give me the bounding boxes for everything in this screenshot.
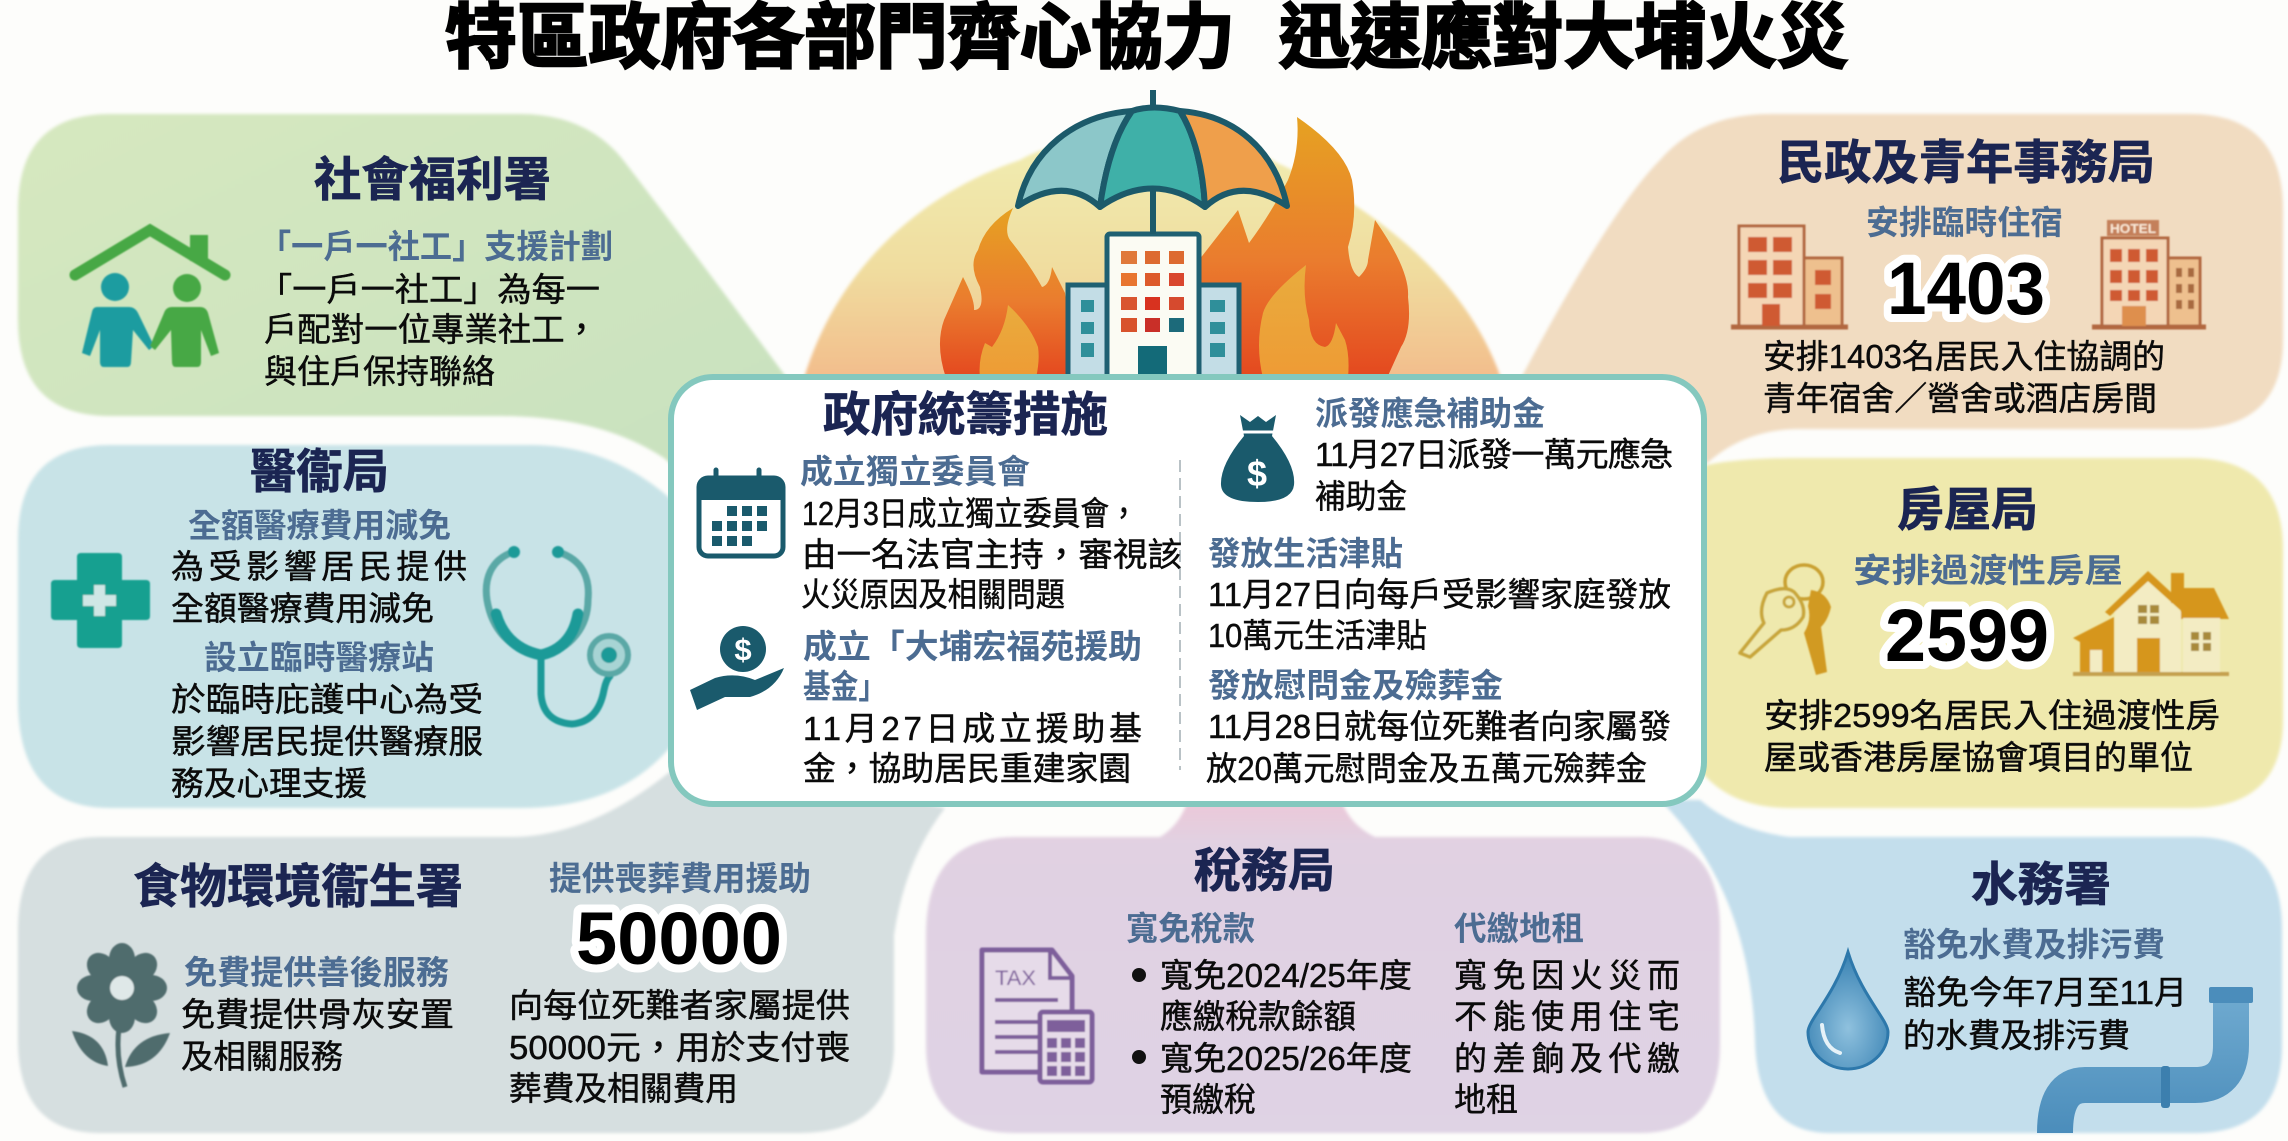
icon: pipe	[2055, 987, 2253, 1133]
panel: social welfare department	[18, 114, 792, 490]
icon: keys	[1740, 565, 1831, 675]
text block: temporary medical stations	[171, 681, 483, 802]
icon: umbrella	[1018, 90, 1287, 234]
text block: rent payment: 不能使用住宅	[1454, 998, 1680, 1035]
text block: relief fund	[803, 710, 1142, 787]
heading: food and environmental hygiene department: 食物環境衞生署	[133, 860, 463, 913]
text block: transitional housing: 屋或香港房屋協會項目的單位	[1764, 739, 2193, 776]
icon: hotel: HOTEL	[2110, 221, 2156, 236]
subheading: medical fee waiver: 全額醫療費用減免	[188, 507, 451, 544]
list: tax waiver items: 應繳稅款餘額	[1160, 998, 1356, 1035]
subheading: water fee waiver: 豁免水費及排污費	[1903, 926, 2165, 963]
text block: independent committee	[801, 495, 1182, 613]
heading: social welfare department: 社會福利署	[314, 153, 551, 206]
text block: temporary accommodation: 青年宿舍／營舍或酒店房間	[1763, 380, 2157, 417]
icon: flower	[72, 943, 170, 1087]
panel: housing bureau	[1690, 458, 2283, 808]
text block: independent committee: 由一名法官主持，審視該	[802, 536, 1182, 573]
icon: calendar	[699, 470, 783, 556]
text block: funeral expense assistance: 向每位死難者家屬提供	[509, 987, 850, 1024]
icon: money bag: $	[1247, 453, 1267, 494]
subheading: temporary accommodation: 安排臨時住宿	[1866, 204, 2063, 241]
list: tax waiver items	[1132, 957, 1412, 1118]
text block: free after-death services: 免費提供骨灰安置	[181, 996, 454, 1033]
text block: rent payment: 地租	[1454, 1081, 1518, 1118]
number: 2599: 2599	[1885, 594, 2049, 677]
text block: transitional housing	[1764, 697, 2220, 776]
text block: rent payment: 寬免因火災而	[1454, 957, 1680, 994]
title	[445, 0, 1848, 78]
icon: medical cross	[51, 553, 150, 648]
text block: living allowance: 11月27日向每戶受影響家庭發放	[1208, 576, 1671, 613]
text block: condolence and funeral payment: 11月28日就每位死難者向家屬發	[1208, 708, 1671, 745]
text block: temporary medical stations: 影響居民提供醫療服	[171, 723, 483, 760]
panel: home affairs and youth affairs bureau	[1520, 114, 2283, 470]
text block: one household one social worker: 戶配對一位專業社工，	[264, 311, 598, 348]
icon: hotel	[2092, 220, 2206, 327]
text block: independent committee: 火災原因及相關問題	[801, 576, 1065, 613]
icon: building	[1068, 234, 1239, 377]
heading: home affairs and youth affairs bureau: 民政及青年事務局	[1777, 136, 2155, 189]
text block: medical fee waiver: 全額醫療費用減免	[171, 590, 434, 627]
text block: one household one social worker: 「一戶一社工」為每一	[258, 271, 600, 308]
text block: temporary medical stations: 於臨時庇護中心為受	[171, 681, 483, 718]
subheading: rent payment: 代繳地租	[1454, 910, 1584, 947]
heading: water supplies department: 水務署	[1971, 858, 2111, 911]
text block: water fee waiver: 的水費及排污費	[1903, 1017, 2130, 1054]
heading: inland revenue department: 稅務局	[1194, 844, 1335, 897]
text block: funeral expense assistance: 50000元，用於支付喪	[509, 1029, 850, 1066]
text block: free after-death services: 及相關服務	[181, 1038, 343, 1075]
heading: housing bureau: 房屋局	[1897, 483, 2038, 536]
number: 1403: 1403	[1887, 247, 2045, 330]
text block: rent payment	[1454, 957, 1680, 1118]
illustration: umbrella shielding building from fire	[804, 90, 1501, 378]
text block: medical fee waiver	[171, 548, 467, 627]
subheading: living allowance: 發放生活津貼	[1208, 535, 1403, 572]
subheading: funeral expense assistance: 提供喪葬費用援助	[549, 860, 811, 897]
number: 50000: 50000	[576, 897, 782, 980]
heading: government coordinated measures: 政府統籌措施	[823, 388, 1108, 441]
subheading: relief fund	[803, 628, 1142, 705]
text block: temporary accommodation	[1763, 338, 2165, 417]
text block: one household one social worker	[258, 271, 600, 390]
text block: emergency subsidy: 補助金	[1315, 478, 1407, 515]
list: tax waiver items: 預繳稅	[1160, 1081, 1256, 1118]
panel: health bureau	[18, 445, 700, 808]
text block: free after-death services	[181, 996, 454, 1075]
icon: home with two people	[75, 230, 225, 367]
panel: food and environmental hygiene department	[18, 760, 945, 1133]
text block: transitional housing: 安排2599名居民入住過渡性房	[1764, 697, 2220, 734]
panel: water supplies department	[1660, 800, 2282, 1133]
list: tax waiver items: 寬免2024/25年度	[1160, 957, 1412, 994]
title: 特區政府各部門齊心協力	[445, 0, 1235, 78]
text block: funeral expense assistance: 葬費及相關費用	[509, 1070, 738, 1107]
text block: condolence and funeral payment	[1206, 708, 1671, 787]
icon: stethoscope	[486, 546, 628, 724]
icon: left flame	[940, 208, 1075, 378]
text block: rent payment: 的差餉及代繳	[1454, 1040, 1680, 1077]
subheading: independent committee: 成立獨立委員會	[800, 453, 1030, 490]
text block: temporary medical stations: 務及心理支援	[171, 765, 367, 802]
icon: right flame	[1199, 117, 1409, 378]
icon: money bag	[1221, 415, 1294, 502]
subheading: emergency subsidy: 派發應急補助金	[1315, 395, 1545, 432]
icon: water drop	[1808, 952, 1888, 1069]
icon: house	[2073, 571, 2229, 676]
subheading: transitional housing: 安排過渡性房屋	[1853, 552, 2123, 589]
text block: medical fee waiver: 為受影響居民提供	[171, 548, 467, 585]
text block: independent committee: 12月3日成立獨立委員會，	[802, 495, 1138, 532]
text block: living allowance	[1208, 576, 1671, 654]
title: 迅速應對大埔火災	[1279, 0, 1848, 78]
subheading: tax waiver: 寬免稅款	[1126, 910, 1255, 947]
text block: water fee waiver	[1903, 974, 2187, 1054]
text block: water fee waiver: 豁免今年7月至11月	[1903, 974, 2187, 1011]
subheading: relief fund: 成立「大埔宏福苑援助	[803, 628, 1142, 665]
subheading: temporary medical stations: 設立臨時醫療站	[204, 639, 434, 676]
text block: temporary accommodation: 安排1403名居民入住協調的	[1763, 338, 2165, 375]
text block: relief fund: 金，協助居民重建家園	[803, 750, 1131, 787]
icon: hand holding coin	[690, 626, 784, 710]
text block: relief fund: 11月27日成立援助基	[803, 710, 1142, 747]
text block: emergency subsidy	[1315, 436, 1673, 515]
icon: hand holding coin: $	[734, 632, 752, 667]
text block: funeral expense assistance	[509, 987, 850, 1107]
icon: apartment building	[1731, 226, 1848, 327]
subheading: free after-death services: 免費提供善後服務	[184, 954, 449, 991]
icon: tax form and calculator	[982, 950, 1092, 1082]
list: tax waiver items: 寬免2025/26年度	[1160, 1040, 1412, 1077]
panel: inland revenue department	[926, 800, 1720, 1133]
subheading: relief fund: 基金」	[803, 668, 886, 705]
panel: government coordinated measures	[671, 377, 1704, 804]
subheading: condolence and funeral payment: 發放慰問金及殮葬金	[1208, 667, 1503, 704]
icon: tax form and calculator: TAX	[995, 967, 1036, 990]
text block: condolence and funeral payment: 放20萬元慰問金及五萬元殮葬金	[1206, 750, 1647, 787]
text block: one household one social worker: 與住戶保持聯絡	[264, 353, 495, 390]
text block: emergency subsidy: 11月27日派發一萬元應急	[1315, 436, 1673, 473]
subheading: one household one social worker: 「一戶一社工」支援計劃	[259, 228, 613, 265]
text block: living allowance: 10萬元生活津貼	[1208, 617, 1427, 654]
heading: health bureau: 醫衞局	[250, 445, 389, 498]
